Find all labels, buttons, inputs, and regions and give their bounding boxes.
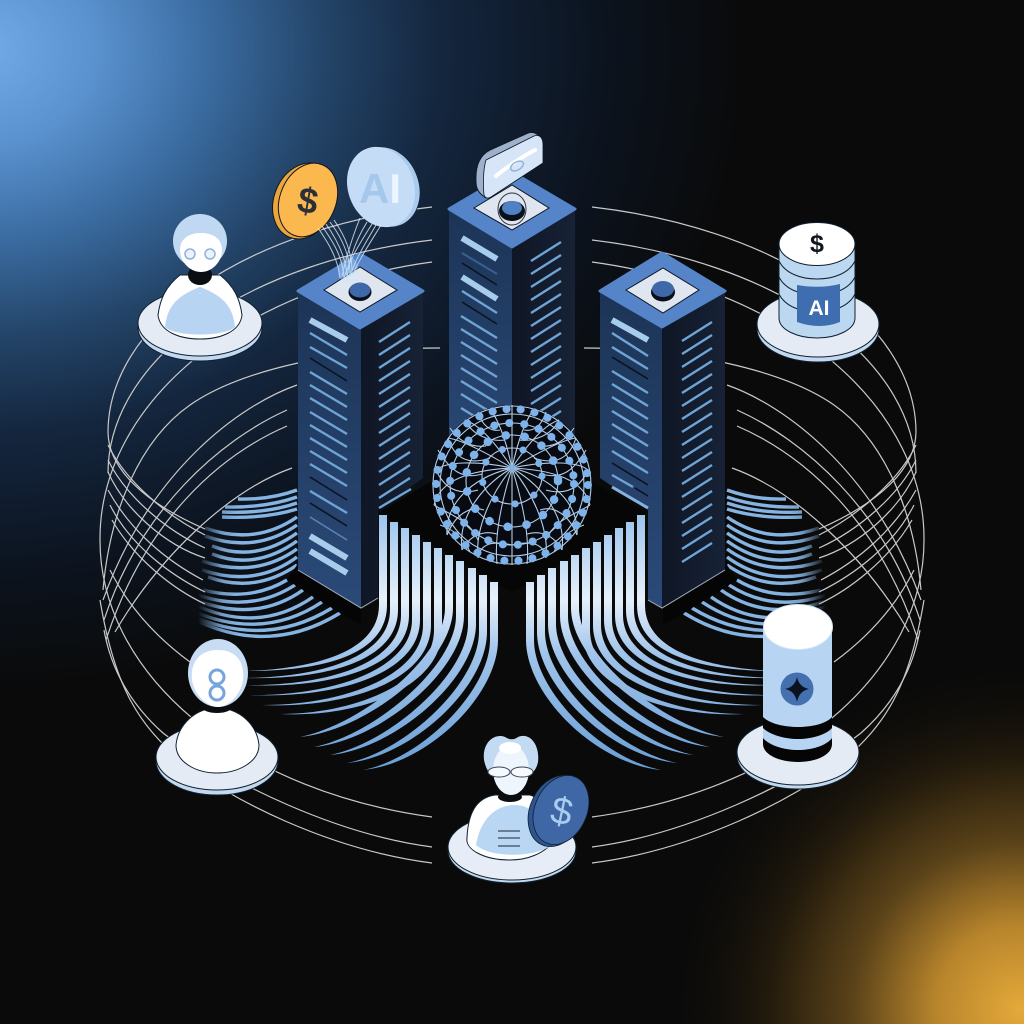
sphere latitude lines [433,405,591,565]
centre tower left face [449,209,512,480]
right tower base edge [648,570,725,608]
torso [467,795,556,860]
cylinder top [764,604,832,650]
platform [757,291,879,362]
cylinder body [763,627,832,727]
platform [448,814,576,883]
torso [158,275,242,339]
robot face [192,650,243,707]
AI label: AI [808,297,830,320]
neck [203,703,231,713]
right tower left face [600,291,662,608]
neck [188,265,212,285]
right tower left vents [612,320,648,508]
cylinder lower black band [763,735,832,762]
AI coin [336,137,431,237]
centre tower right vents [531,242,561,430]
left tower left face [298,291,361,608]
face [493,745,529,795]
right tower cap [600,253,725,327]
hardware device on centre tower [476,132,543,198]
stack top [779,222,855,266]
coin stack with AI label, top right [757,222,879,362]
centre tower button [498,193,526,225]
right server tower [600,253,725,608]
orbit rings, left side [100,207,440,863]
sphere meridian lines, left [434,409,512,564]
head [173,214,227,268]
central data flows, right bundle [526,515,778,770]
right tower right face [662,291,725,608]
face [180,233,222,272]
navy dollar coin: $ [547,789,576,835]
hair highlight [499,742,521,754]
left tower cap plate [324,267,397,312]
left server tower [298,254,423,608]
document lines [498,831,520,846]
stack body [779,244,855,338]
centre tower cap [449,172,575,247]
left tower base edge [298,570,378,608]
central data flows, left bundle [246,515,498,770]
data streams from coins into left tower [318,218,381,284]
orbit rings, right side [584,207,924,863]
centre tower left vents [461,238,497,430]
centre server tower [449,172,575,480]
star badge [780,672,814,706]
right tower right vents [682,322,712,562]
user on platform, top left [138,214,262,361]
floor shadow strips under outer towers [287,565,737,625]
AI coin: AI [359,165,401,212]
cylinder on platform, bottom right [737,604,859,789]
left tower button [348,282,372,301]
right tower button [651,281,675,302]
right tower cap plate [626,268,699,313]
stack layer lines [779,261,855,312]
navy dollar coin [517,766,599,856]
gold dollar coin [262,154,348,248]
neck [498,792,522,802]
eyes [185,249,215,259]
torso shading [165,287,235,334]
robot head [188,639,248,707]
double ring symbol [210,670,224,700]
sphere nodes [436,409,588,561]
platform [138,290,262,361]
left tower left vents [310,320,347,573]
left tower right vents [379,322,411,508]
gold dollar coin: $ [294,179,321,222]
platform [156,724,278,795]
curved data streams behind right tower [684,490,834,636]
platform [737,719,859,789]
cylinder upper black band [763,717,832,739]
centre tower cap plate [474,185,549,230]
robot body [176,708,259,773]
neural network sphere [432,405,592,565]
black central floor diamond [378,434,646,592]
centre tower right face [512,209,575,480]
hair [484,736,538,775]
torso shading [476,805,552,855]
robot on platform, bottom left [156,639,278,795]
person with glasses and coin, bottom centre [448,736,599,883]
sphere meridian lines, right [512,409,590,564]
curved data streams behind left tower [190,490,340,636]
cylinder light band [763,724,832,750]
left tower right face [361,291,423,608]
left tower cap [298,254,423,328]
dollar sign: $ [810,230,824,258]
glasses [488,767,533,777]
